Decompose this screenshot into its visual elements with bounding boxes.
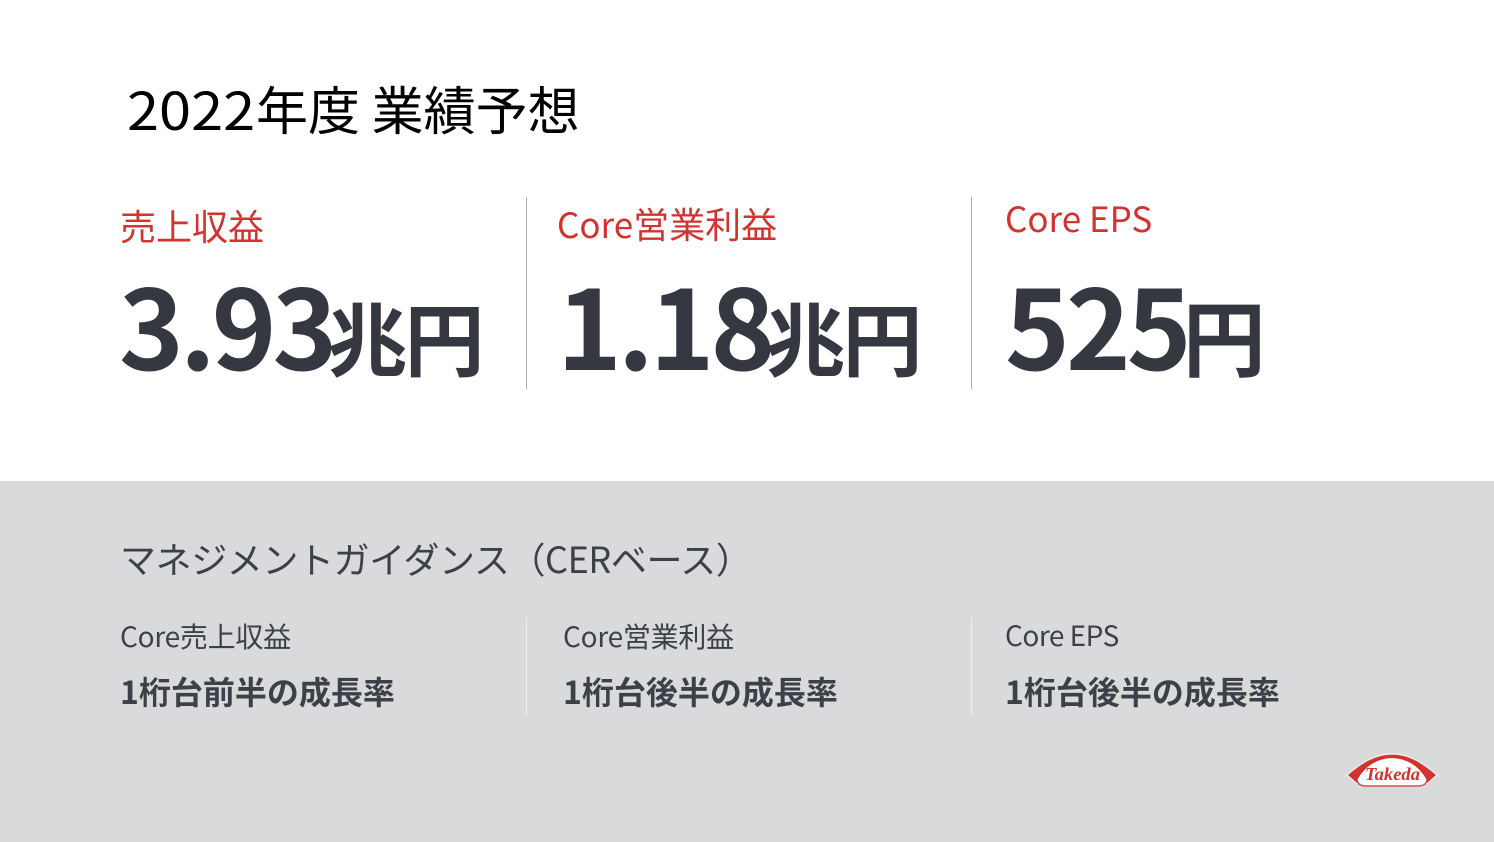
guidance label: core EPS: Core EPS xyxy=(1005,615,1119,655)
panel: guidance background xyxy=(0,481,1494,842)
value: core operating profit: 1.18兆円 xyxy=(557,242,919,402)
guidance value: core EPS: 1桁台後半の成長率 xyxy=(1005,668,1280,714)
label: core EPS: Core EPS xyxy=(1005,192,1152,243)
guidance value: core revenue: 1桁台前半の成長率 xyxy=(120,668,395,714)
guidance label: core revenue: Core売上収益 xyxy=(120,616,291,656)
label: core operating profit: Core営業利益 xyxy=(557,197,777,249)
label: revenue: 売上収益 xyxy=(120,199,264,251)
guidance heading: マネジメントガイダンス（CERベース） xyxy=(120,532,751,584)
title: 2022 xyxy=(127,70,255,145)
icon: Takeda logo xyxy=(1346,754,1438,787)
title: 年度 業績予想 xyxy=(256,70,580,145)
value: core EPS: 525円 xyxy=(1005,242,1263,402)
guidance value: core operating profit: 1桁台後半の成長率 xyxy=(563,668,838,714)
value: revenue: 3.93兆円 xyxy=(119,242,481,402)
icon: Takeda logo: Takeda xyxy=(1365,764,1420,784)
guidance label: core operating profit: Core営業利益 xyxy=(563,616,734,656)
